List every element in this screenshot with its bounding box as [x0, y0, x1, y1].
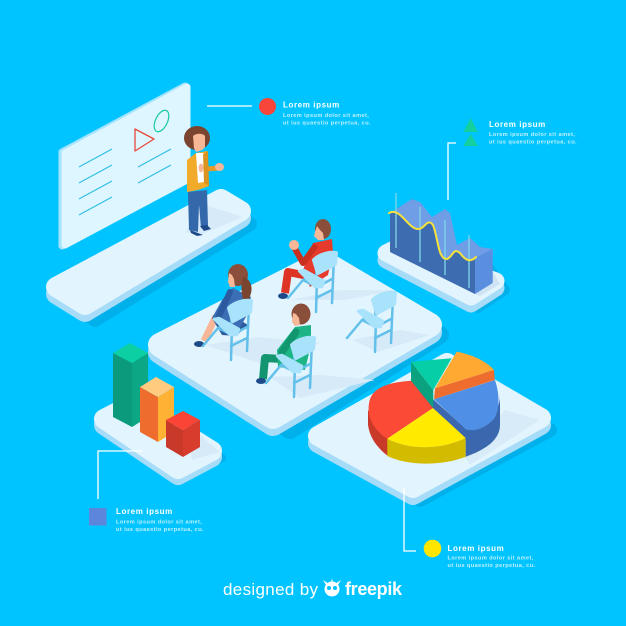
- person: red student: [278, 219, 336, 312]
- callout body: Lorem ipsum dolor sit amet,: [448, 556, 534, 562]
- callout body: Lorem ipsum dolor sit amet,: [116, 520, 202, 526]
- orange bar: [140, 377, 174, 442]
- chair under red student: [288, 253, 336, 312]
- pie base fill: [411, 381, 466, 440]
- callout heading: Lorem ipsum: [283, 100, 340, 110]
- right face: [475, 249, 493, 294]
- pie chart: [368, 352, 500, 464]
- slice: orange: [434, 352, 495, 399]
- back area: [390, 199, 493, 270]
- board circle: [151, 108, 172, 134]
- person: green student: [256, 304, 314, 397]
- front area: [390, 212, 476, 294]
- icon: green arrows: [463, 118, 478, 146]
- callout body: Lorem ipsum dolor sit amet,: [283, 113, 369, 119]
- icon: red circle: [259, 98, 276, 115]
- chair under green student: [266, 338, 314, 397]
- line chart: [389, 193, 493, 294]
- red bar: [166, 411, 200, 457]
- callout body: ut ius quaestio perpetua, cu.: [489, 140, 577, 146]
- icon: freepik mascot: [323, 578, 341, 596]
- callout body: Lorem ipsum dolor sit amet,: [489, 132, 575, 138]
- yellow curve: [389, 212, 476, 260]
- callout body: ut ius quaestio perpetua, cu.: [448, 563, 536, 569]
- slice: blue: [434, 380, 500, 457]
- vertical lines: [396, 193, 469, 288]
- callout: bottom left square: [89, 451, 204, 533]
- slice: red: [368, 381, 433, 456]
- callout: bottom right yellow: [404, 488, 536, 569]
- person: blue student: [194, 264, 252, 360]
- chair under blue student: [203, 301, 251, 360]
- footer credit: freepik: [345, 579, 403, 599]
- empty chair: [347, 293, 395, 352]
- bar chart: [113, 343, 200, 457]
- board text lines: [79, 149, 171, 215]
- callout heading: Lorem ipsum: [489, 120, 546, 129]
- panel: presenter platform: [56, 199, 250, 320]
- green bar: [113, 343, 148, 427]
- board triangle: [135, 129, 154, 151]
- callout body: ut ius quaestio perpetua, cu.: [116, 527, 204, 533]
- callout heading: Lorem ipsum: [116, 507, 173, 516]
- slice: green: [411, 358, 452, 408]
- panel: presentation board: [62, 86, 187, 246]
- panel: line chart platform: [386, 246, 505, 308]
- icon: blue square: [89, 508, 106, 526]
- callout: top right arrows: [448, 118, 577, 200]
- footer credit: designed by: [223, 580, 318, 599]
- callout: top red: [207, 98, 371, 126]
- figure: presenter: [184, 126, 224, 236]
- panel: classroom platform: [160, 262, 440, 430]
- icon: yellow circle: [424, 540, 441, 557]
- footer credit: [223, 578, 403, 599]
- callout heading: Lorem ipsum: [448, 544, 504, 553]
- slice: yellow: [387, 408, 466, 464]
- callout body: ut ius quaestio perpetua, cu.: [283, 120, 371, 126]
- panel: bar chart platform: [104, 403, 222, 480]
- panel: pie chart platform: [318, 363, 550, 500]
